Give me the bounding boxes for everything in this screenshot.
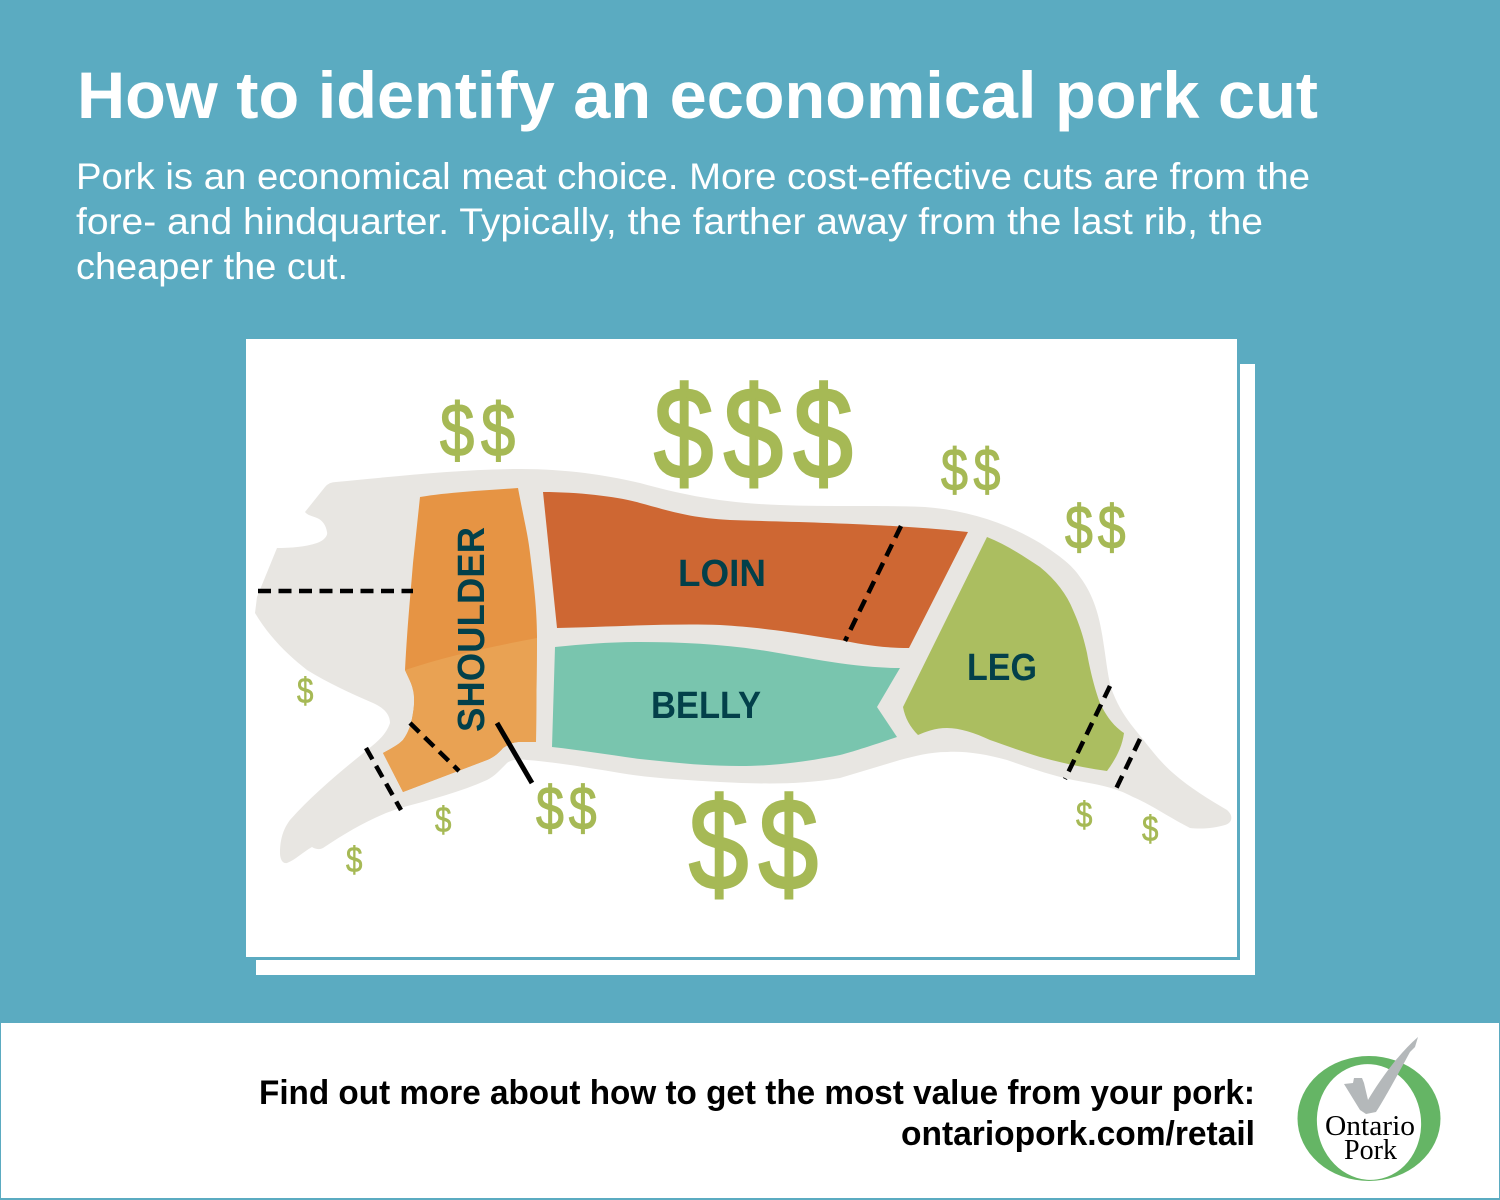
cut lines — [258, 526, 1140, 810]
cut: shoulder — [383, 488, 537, 792]
price markers: $ — [435, 799, 451, 840]
panel: pork cut diagram — [246, 339, 1255, 975]
footer text — [259, 1074, 1255, 1153]
label: leg: LEG — [967, 647, 1037, 689]
price markers — [297, 361, 1158, 917]
cut: belly — [552, 642, 900, 766]
price markers: $ — [1076, 794, 1092, 835]
label: shoulder: SHOULDER — [451, 527, 493, 732]
price markers: $ — [1142, 808, 1158, 849]
intro text: cheaper the cut. — [76, 246, 348, 287]
price markers: $$ — [440, 388, 515, 472]
cut: loin — [543, 492, 968, 648]
label: belly: BELLY — [651, 685, 761, 727]
footer text: ontariopork.com/retail — [901, 1115, 1255, 1153]
price markers: $$$ — [654, 361, 853, 506]
logo: Ontario Pork — [1298, 1037, 1440, 1187]
logo wordmark: Ontario — [1325, 1110, 1415, 1142]
price markers: $$ — [1065, 494, 1126, 562]
cut: leg — [903, 537, 1124, 771]
price markers: $$ — [689, 772, 818, 917]
logo wordmark — [1325, 1110, 1415, 1166]
label: loin: LOIN — [678, 553, 766, 595]
footer text: Find out more about how to get the most value from your pork: — [259, 1074, 1255, 1112]
price markers: $ — [297, 670, 313, 711]
logo wordmark: Pork — [1344, 1134, 1397, 1166]
footer panel — [1, 1023, 1499, 1198]
title: How to identify an economical pork cut — [77, 58, 1318, 132]
price markers: $ — [346, 839, 362, 880]
intro text: fore- and hindquarter. Typically, the farther away from the last rib, the — [76, 201, 1263, 242]
intro text — [76, 156, 1310, 287]
price markers: $$ — [536, 775, 597, 843]
pig body silhouette — [255, 469, 1231, 863]
icon: check mark — [1344, 1037, 1418, 1114]
price markers: $$ — [941, 438, 1000, 503]
intro text: Pork is an economical meat choice. More cost-effective cuts are from the — [76, 156, 1310, 197]
